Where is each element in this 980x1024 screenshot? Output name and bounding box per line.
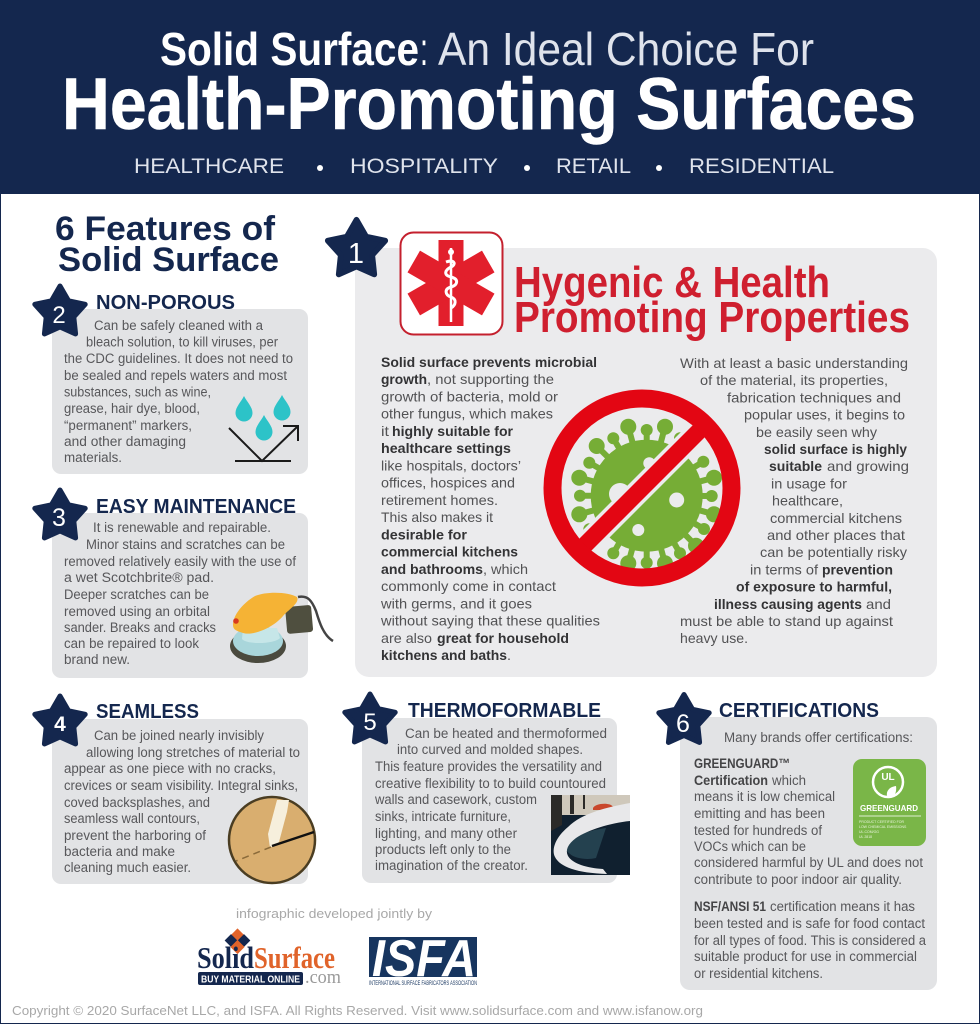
panel 1: hygienic and health promoting properties [328, 220, 937, 677]
icon: greenguard badge: GREENGUARD [860, 803, 918, 813]
text block: products left only to the [375, 842, 511, 857]
text block: the CDC guidelines. It does not need to [64, 351, 293, 366]
heading: thermoformable: THERMOFORMABLE [408, 700, 601, 722]
text block: crevices or seam visibility. Integral sinks, [64, 778, 298, 793]
text block: nsf: for all types of food. This is considered a [694, 933, 926, 948]
logo: SolidSurface.com: BUY MATERIAL ONLINE [201, 974, 300, 986]
text block [64, 728, 300, 875]
text block: nsf: been tested and is safe for food contact [694, 916, 925, 931]
text block: can be repaired to look [64, 636, 199, 651]
text block: greenguard: contribute to poor indoor air quality. [694, 872, 902, 887]
icon: star of life [400, 232, 502, 334]
text block [374, 726, 607, 873]
text block: appear as one piece with no cracks, [64, 761, 276, 776]
text block: removed relatively easily with the use of [64, 554, 296, 569]
icon: orbital sander [230, 593, 333, 663]
text block: greenguard [694, 730, 923, 887]
text block: prevent the harboring of [64, 828, 206, 843]
panel 1 left text block: without saying that these qualities [380, 613, 600, 629]
panel 1 left text block: offices, hospices and [381, 475, 515, 491]
text block: Minor stains and scratches can be [86, 537, 285, 552]
heading: non-porous: NON-POROUS [96, 292, 235, 314]
panel 1 left text block: like hospitals, doctors’ [381, 457, 521, 473]
text block: substances, such as wine, [64, 385, 211, 400]
text block: It is renewable and repairable. [93, 520, 271, 535]
icon: greenguard badge: PRODUCT CERTIFIED FOR [859, 820, 904, 824]
star badge 5 [345, 694, 395, 742]
heading: easy maintenance: EASY MAINTENANCE [96, 496, 296, 518]
text block: greenguard: means it is low chemical [694, 789, 835, 804]
sector list: RETAIL [556, 155, 631, 178]
text block: coved backsplashes, and [64, 795, 210, 810]
text block: a wet Scotchbrite® pad. [64, 570, 214, 585]
panel 1 left text block: with germs, and it goes [380, 595, 532, 611]
star badge 6: 6 [676, 710, 690, 738]
section heading: 6 features: 6 Features of [55, 210, 276, 248]
text block: greenguard: VOCs which can be [694, 839, 806, 854]
panel 1 left text block: retirement homes. [381, 492, 498, 508]
credit line: infographic developed jointly by [236, 906, 433, 921]
panel 1 right text block: healthcare, [772, 493, 843, 509]
panel 1 right text block: of the material, its properties, [700, 372, 888, 388]
panel 1 left text block: are also [381, 630, 432, 646]
text block: cleaning much easier. [64, 860, 191, 875]
text block: Can be heated and thermoformed [405, 726, 607, 741]
panel 1 left text block: , which [483, 561, 528, 577]
panel 6: certifications [659, 694, 937, 990]
panel 1 right text block: heavy use. [680, 630, 748, 646]
sector list [134, 155, 834, 178]
sector list: HEALTHCARE [134, 155, 284, 178]
star badge 1 [328, 220, 385, 274]
panel 1 left text block: . [507, 647, 511, 663]
panel 1 right text block: in usage for [771, 475, 847, 491]
logo: SolidSurface.com: .com [305, 967, 341, 988]
star badge 4: 4 [54, 713, 66, 736]
text block: lighting, and many other [375, 826, 517, 841]
panel 1 right text block: solid surface is highly [764, 441, 907, 457]
copyright footer: Copyright © 2020 SurfaceNet LLC, and ISFA. All Rights Reserved. Visit www.solidsurface.com and www.isfanow.org [12, 1003, 703, 1018]
icon: greenguard badge: UL 2818 [859, 835, 872, 839]
star badge 3: 3 [52, 504, 66, 532]
panel 1 right text block [680, 355, 909, 646]
text block: greenguard: GREENGUARD™ [694, 756, 790, 771]
panel 1 left text block: and bathrooms [381, 561, 483, 577]
panel 1 right text block: illness causing agents [714, 596, 862, 612]
image: thermoformed sheet [551, 795, 630, 875]
panel 1 left text block: healthcare settings [381, 440, 511, 456]
section heading: 6 features: Solid Surface [58, 241, 279, 279]
title line 1 [160, 23, 814, 75]
icon: water drops repelled [229, 395, 298, 461]
text block: bacteria and make [64, 844, 175, 859]
icon: greenguard badge: UL [881, 772, 895, 783]
title line 1: An Ideal Choice For [438, 23, 814, 75]
text block: greenguard: which [771, 773, 806, 788]
heading: certifications: CERTIFICATIONS [719, 700, 879, 722]
text block: grease, hair dye, blood, [64, 401, 200, 416]
panel 1 left text block [380, 354, 600, 663]
panel 1 heading [514, 258, 910, 342]
panel 3: easy maintenance [35, 490, 333, 678]
panel 1 right text block: be easily seen why [756, 424, 877, 440]
text block: allowing long stretches of material to [86, 745, 300, 760]
panel 1 heading: Promoting Properties [514, 293, 910, 342]
text block: imagination of the creator. [375, 858, 528, 873]
panel 1 left text block: other fungus, which makes [381, 406, 553, 422]
panel 1 right text block: popular uses, it begins to [744, 407, 905, 423]
panel 2: non-porous [35, 286, 308, 474]
icon: greenguard badge: LOW CHEMICAL EMISSIONS [859, 825, 907, 829]
logo: ISFA: INTERNATIONAL SURFACE FABRICATORS ASSOCIATION [369, 981, 477, 987]
icon: greenguard badge: UL.COM/GG [859, 830, 879, 834]
panel 1 right text block: can be potentially risky [760, 544, 907, 560]
panel 5: thermoformable [345, 694, 630, 883]
panel 1 right text block: suitable [769, 458, 822, 474]
panel 1 left text block: Solid surface prevents microbial [381, 354, 597, 370]
text block: nsf [694, 899, 926, 981]
text block [64, 520, 296, 667]
logo: SolidSurface.com: Solid [197, 940, 254, 975]
panel 1 left text block: growth of bacteria, mold or [381, 388, 558, 404]
star badge 1: 1 [348, 238, 364, 270]
icon: greenguard badge [853, 759, 926, 846]
panel 1 left text block: This also makes it [381, 509, 493, 525]
panel 1 right text block: With at least a basic understanding [680, 355, 908, 371]
text block: into curved and molded shapes. [397, 742, 583, 757]
title line 1: : [420, 23, 428, 75]
text block: be sealed and repels waters and most [64, 368, 287, 383]
panel 1 left text block: kitchens and baths [381, 647, 507, 663]
sector list: HOSPITALITY [350, 155, 498, 178]
star badge 2 [35, 286, 85, 334]
section heading: 6 features [55, 210, 279, 279]
text block: Can be joined nearly invisibly [94, 728, 264, 743]
panel 1 right text block: of exposure to harmful, [736, 579, 892, 595]
panel 1 right text block: and other places that [767, 527, 905, 543]
text block: This feature provides the versatility and [375, 759, 602, 774]
text block: Can be safely cleaned with a [94, 318, 263, 333]
text block: seamless wall contours, [64, 811, 200, 826]
panel 1 right text block: in terms of [750, 561, 818, 577]
panel 1 left text block: , not supporting the [427, 371, 554, 387]
icon: virus with prohibition sign [552, 398, 732, 578]
star badge 5: 5 [363, 709, 377, 736]
panel 1 right text block: and [866, 596, 891, 612]
panel 1 left text block: growth [381, 371, 427, 387]
star badge 6 [659, 694, 709, 742]
panel 1 right text block: commercial kitchens [770, 510, 902, 526]
panel 1 left text block: it [381, 423, 389, 439]
text block: nsf: certification means it has [770, 899, 915, 914]
panel 1 right text block: must be able to stand up against [680, 613, 893, 629]
star badge 2: 2 [52, 302, 66, 329]
text block: greenguard: Many brands offer certifications: [724, 730, 913, 745]
panel 1 left text block: great for household [437, 630, 569, 646]
panel 1 left text block: commercial kitchens [381, 544, 518, 560]
title line 1: Solid Surface [160, 23, 419, 75]
star badge 3 [35, 490, 85, 538]
logo: SolidSurface.com: Surface [254, 940, 335, 975]
panel 1 left text block: commonly come in contact [381, 578, 556, 594]
text block: removed using an orbital [64, 604, 210, 619]
panel 1 heading: Hygenic & Health [514, 258, 830, 307]
panel 1 right text block: and growing [827, 458, 909, 474]
header banner [0, 0, 980, 194]
text block: greenguard: emitting and has been [694, 806, 825, 821]
text block: nsf: NSF/ANSI 51 [694, 899, 766, 914]
text block: walls and casework, custom [374, 792, 537, 807]
text block: greenguard: Certification [694, 773, 768, 788]
text block: sinks, intricate furniture, [375, 809, 511, 824]
icon: seam close-up circle [229, 797, 315, 883]
text block: nsf: suitable product for use in commercial [694, 949, 917, 964]
text block: bleach solution, to kill viruses, per [86, 335, 278, 350]
text block: materials. [64, 450, 122, 465]
text block: sander. Breaks and cracks [64, 620, 216, 635]
text block: “permanent” markers, [64, 418, 192, 433]
panel 4: seamless [35, 696, 315, 884]
logo: SolidSurface.com [197, 928, 341, 988]
text block: nsf: or residential kitchens. [694, 966, 823, 981]
text block: Deeper scratches can be [64, 587, 209, 602]
logo: ISFA: ISFA [372, 930, 476, 988]
panel 1 left text block: desirable for [381, 526, 468, 542]
panel 1 right text block: fabrication techniques and [727, 389, 901, 405]
sector list: RESIDENTIAL [689, 155, 834, 178]
panel 1 right text block: prevention [822, 561, 893, 577]
text block: and other damaging [64, 434, 186, 449]
text block: greenguard: tested for hundreds of [694, 823, 822, 838]
text block: creative flexibility to to build countoured [375, 776, 606, 791]
panel 1 left text block: highly suitable for [392, 423, 514, 439]
text block [64, 318, 293, 465]
text block: greenguard: considered harmful by UL and does not [694, 855, 923, 870]
text block: brand new. [64, 652, 130, 667]
star badge 4 [35, 696, 85, 744]
title line 2: Health-Promoting Surfaces [62, 64, 916, 145]
heading: seamless: SEAMLESS [96, 701, 199, 723]
